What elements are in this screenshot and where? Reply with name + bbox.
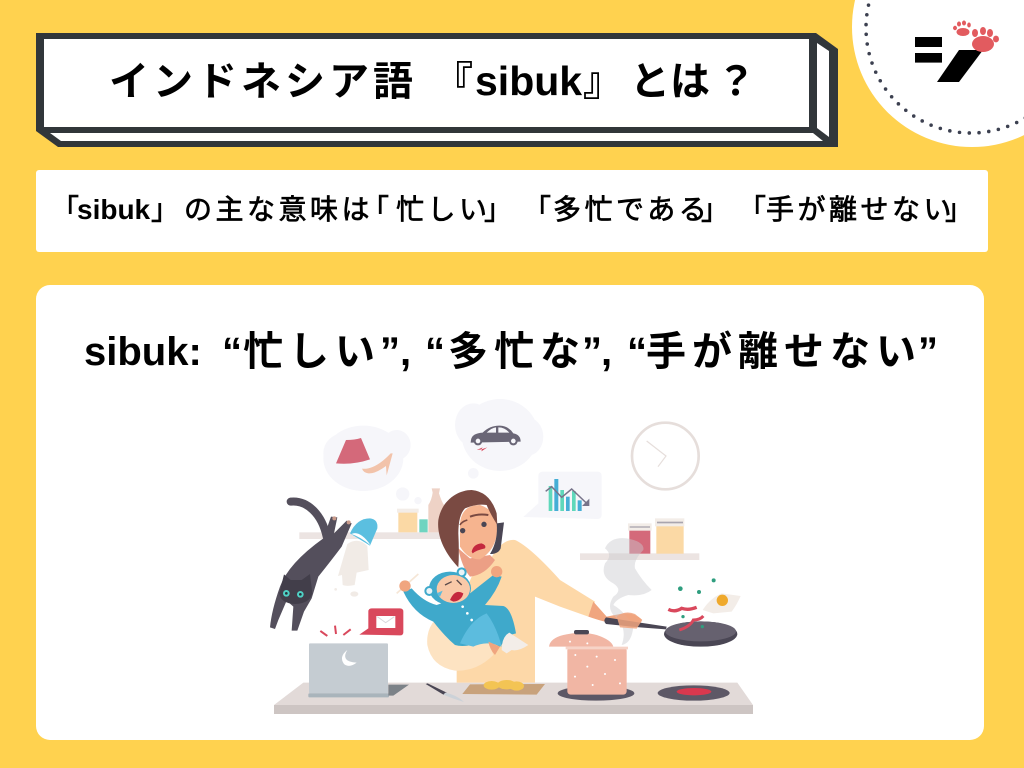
text: 手が離せない <box>646 330 922 374</box>
mail notification <box>320 608 403 636</box>
thought bubble: skirt and shoe <box>323 426 411 491</box>
title box: インドネシア語 <box>109 60 417 104</box>
text: sibuk: <box>84 330 202 374</box>
knife <box>426 683 464 702</box>
title text <box>109 58 760 104</box>
title box: は <box>670 60 714 104</box>
text: 手が離せない <box>766 194 955 225</box>
title box: sibuk <box>475 58 582 104</box>
text: ” <box>918 330 938 374</box>
text: 忙しい <box>243 330 381 374</box>
burners <box>558 685 730 701</box>
text: , <box>400 330 411 374</box>
title box: 『 <box>433 60 477 104</box>
text: 多忙である <box>553 194 710 225</box>
thought bubble: car <box>396 399 543 504</box>
text: 「 <box>51 194 83 225</box>
text: sibuk <box>77 194 150 225</box>
main panel <box>36 285 984 740</box>
text: 「 <box>523 194 555 225</box>
falling cat <box>270 502 352 631</box>
subtitle panel <box>36 170 988 252</box>
title box: 』 <box>583 60 627 104</box>
pot <box>549 630 628 695</box>
text: 」 <box>484 194 516 225</box>
text: 」 <box>701 194 733 225</box>
counter <box>274 683 753 714</box>
title box: と <box>630 60 674 104</box>
text: ” <box>380 330 400 374</box>
main heading <box>84 330 938 374</box>
text: “ <box>222 330 242 374</box>
left shelf with jars <box>299 488 444 539</box>
text: 」 <box>945 194 977 225</box>
flying food <box>668 578 741 630</box>
chart speech bubble <box>523 472 602 519</box>
text: 忙しい <box>396 194 491 225</box>
wall clock <box>632 423 699 489</box>
right shelf with jars <box>580 518 699 560</box>
laptop <box>308 643 409 697</box>
subtitle text <box>51 194 977 225</box>
text: “ <box>627 330 647 374</box>
bread on cutting board <box>462 680 545 695</box>
frying pan with hand <box>604 612 737 647</box>
text: “ <box>425 330 445 374</box>
text: 多忙な <box>448 330 586 374</box>
text: 」 <box>151 194 183 225</box>
steam <box>604 538 652 645</box>
slipper and spilled milk <box>334 518 377 597</box>
text: ” <box>582 330 602 374</box>
woman <box>427 490 642 683</box>
text: の主な意味は <box>184 194 373 225</box>
title box <box>36 33 838 147</box>
text: 「 <box>738 194 770 225</box>
text: , <box>601 330 612 374</box>
text: 「 <box>361 194 393 225</box>
crying baby <box>397 566 528 655</box>
title box: ？ <box>716 60 760 104</box>
